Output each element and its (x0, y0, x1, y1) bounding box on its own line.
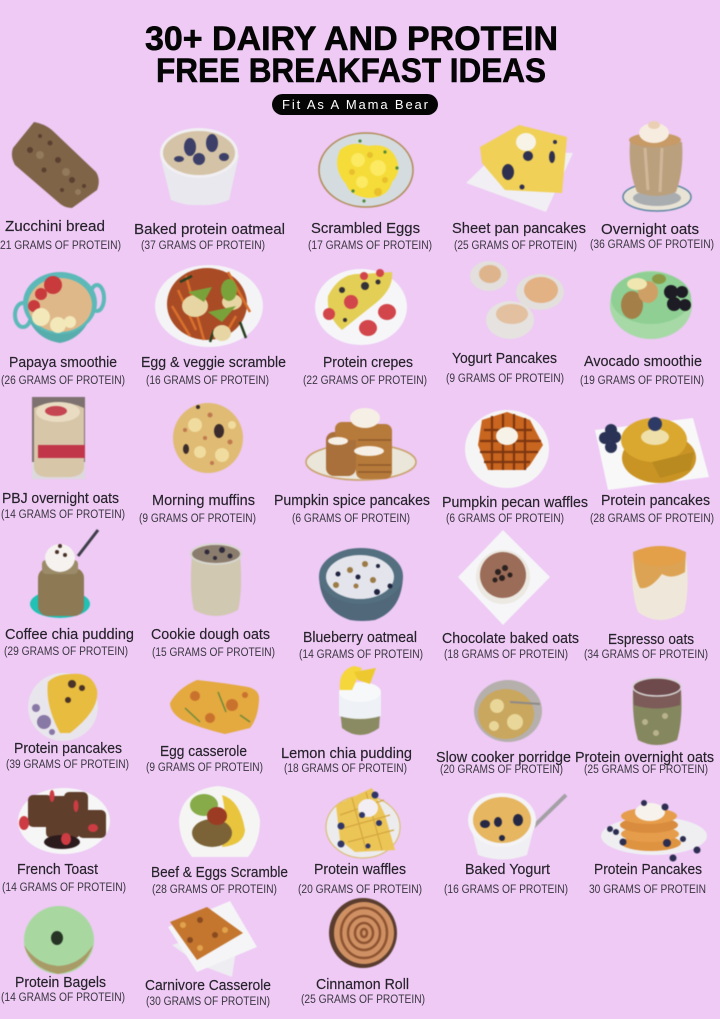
icon: pancake stack with blueberries (601, 800, 707, 862)
protein amount: (20 GRAMS OF PROTEIN) (440, 764, 563, 776)
protein amount: (16 GRAMS OF PROTEIN) (146, 375, 269, 387)
name: Protein pancakes (601, 492, 710, 509)
card: Protein pancakes (590, 417, 714, 525)
name: Cinnamon Roll (316, 976, 409, 993)
protein amount: (14 GRAMS OF PROTEIN) (2, 882, 126, 894)
card: Beef & Eggs Scramble (151, 786, 288, 896)
protein amount: (20 GRAMS OF PROTEIN) (298, 884, 422, 896)
protein amount: (37 GRAMS OF PROTEIN) (141, 240, 265, 252)
name: Overnight oats (601, 221, 699, 238)
icon: espresso oats jar (632, 546, 688, 620)
card: Lemon chia pudding (281, 666, 412, 775)
icon: baked yogurt ramekin with spoon (468, 793, 566, 860)
protein amount: (14 GRAMS OF PROTEIN) (1, 992, 125, 1004)
card: French Toast (2, 788, 126, 894)
card: Carnivore Casserole (145, 901, 271, 1008)
name: Protein Pancakes (594, 861, 702, 878)
name: Egg & veggie scramble (141, 354, 286, 371)
brand pill (272, 94, 438, 115)
protein amount: (29 GRAMS OF PROTEIN) (4, 646, 128, 658)
name: Chocolate baked oats (442, 630, 579, 647)
card: Espresso oats (584, 546, 708, 661)
icon: pumpkin spice pancake stack (306, 408, 416, 480)
name: Espresso oats (608, 631, 694, 648)
name: Pumpkin spice pancakes (274, 492, 430, 509)
protein amount: (18 GRAMS OF PROTEIN) (444, 649, 568, 661)
card: Zucchini bread (0, 122, 121, 252)
protein amount: (34 GRAMS OF PROTEIN) (584, 649, 708, 661)
card: Cookie dough oats (151, 544, 275, 659)
card: Morning muffins (139, 403, 256, 525)
icon: chocolate chip pancake on floral plate (28, 673, 98, 741)
name: Beef & Eggs Scramble (151, 864, 288, 881)
protein amount: (9 GRAMS OF PROTEIN) (446, 373, 564, 385)
protein amount: (14 GRAMS OF PROTEIN) (1, 509, 125, 521)
card: Sheet pan pancakes (452, 125, 586, 252)
protein amount: (28 GRAMS OF PROTEIN) (152, 884, 277, 896)
icon: egg and veggie scramble plate (155, 265, 263, 347)
icon: protein waffle with blueberries (326, 788, 400, 858)
icon: French toast plate (18, 788, 110, 854)
protein amount: (14 GRAMS OF PROTEIN) (299, 649, 423, 661)
icon: coffee chia pudding jar (30, 530, 98, 618)
icon: scrambled eggs plate (319, 133, 413, 207)
protein amount: (25 GRAMS OF PROTEIN) (301, 994, 425, 1006)
card: Overnight oats (590, 121, 714, 251)
name: Blueberry oatmeal (303, 629, 417, 646)
name: Scrambled Eggs (311, 220, 420, 237)
icon: cookie dough oats jar (191, 544, 241, 616)
card: Blueberry oatmeal (299, 548, 423, 661)
protein amount: (19 GRAMS OF PROTEIN) (580, 375, 704, 387)
name: Pumpkin pecan waffles (442, 494, 588, 511)
icon: three yogurt pancakes (470, 261, 564, 339)
card: Yogurt Pancakes (446, 261, 564, 385)
card: Protein pancakes 2 (6, 673, 129, 771)
name: Protein pancakes (14, 740, 122, 757)
card: Protein Pancakes 3 (589, 800, 707, 896)
icon: morning muffin (173, 403, 243, 473)
name: Protein crepes (323, 354, 413, 371)
name: Zucchini bread (5, 218, 105, 235)
name: Carnivore Casserole (145, 977, 271, 994)
name: Protein waffles (314, 861, 406, 878)
card: Cinnamon Roll (301, 898, 425, 1006)
icon: avocado topped bagel (24, 906, 94, 974)
icon: egg casserole slice (170, 680, 259, 734)
icon: oatmeal ramekin (160, 128, 239, 205)
icon: cinnamon roll (329, 898, 397, 968)
icon: pumpkin pecan waffle (465, 410, 549, 488)
card: Egg & veggie scramble (141, 265, 286, 387)
title: FREE BREAKFAST IDEAS (156, 52, 546, 90)
name: PBJ overnight oats (2, 490, 119, 507)
card: Baked protein oatmeal (134, 128, 285, 252)
protein amount: (18 GRAMS OF PROTEIN) (284, 763, 407, 775)
card: Egg casserole (146, 680, 263, 774)
name: Yogurt Pancakes (452, 350, 557, 367)
protein amount: (6 GRAMS OF PROTEIN) (446, 513, 564, 525)
card: Scrambled Eggs (308, 133, 432, 252)
name: Baked protein oatmeal (134, 221, 285, 238)
name: Morning muffins (152, 492, 255, 509)
name: Sheet pan pancakes (452, 220, 586, 237)
name: Egg casserole (160, 743, 247, 760)
protein amount: (9 GRAMS OF PROTEIN) (146, 762, 263, 774)
card: Protein waffles (298, 788, 422, 896)
card: Pumpkin spice pancakes (274, 408, 430, 525)
icon: avocado smoothie bowl (610, 271, 692, 339)
icon: crepes with strawberries (315, 269, 407, 345)
card: Protein Bagels (1, 906, 125, 1004)
protein amount: (9 GRAMS OF PROTEIN) (139, 513, 256, 525)
card: Avocado smoothie (580, 271, 704, 387)
icon: lemon chia pudding glass (339, 666, 381, 735)
protein amount: (39 GRAMS OF PROTEIN) (6, 759, 129, 771)
name: Coffee chia pudding (5, 626, 134, 643)
protein amount: (26 GRAMS OF PROTEIN) (1, 375, 125, 387)
protein amount: (25 GRAMS OF PROTEIN) (454, 240, 577, 252)
icon: papaya smoothie bowl (15, 272, 104, 343)
card: Papaya smoothie (1, 272, 125, 387)
card: Protein overnight oats (575, 678, 714, 776)
card: Slow cooker porridge (436, 680, 571, 776)
icon: carnivore casserole on plates (168, 901, 257, 977)
icon: sheet pan pancakes on plate (466, 125, 573, 212)
card: Pumpkin pecan waffles (442, 410, 588, 525)
icon: PBJ overnight oats jar (32, 397, 85, 479)
card: Coffee chia pudding (4, 530, 134, 658)
name: Slow cooker porridge (436, 749, 571, 766)
protein amount: (22 GRAMS OF PROTEIN) (303, 375, 427, 387)
icon: zucchini bread loaf (12, 122, 99, 208)
protein amount: (16 GRAMS OF PROTEIN) (444, 884, 568, 896)
name: Papaya smoothie (9, 354, 117, 371)
title: 30+ DAIRY AND PROTEIN (145, 20, 558, 58)
card: PBJ overnight oats (1, 397, 125, 521)
protein amount: (30 GRAMS OF PROTEIN) (146, 996, 270, 1008)
brand pill: Fit As A Mama Bear (282, 97, 429, 112)
title (145, 20, 558, 90)
icon: protein overnight oats jar (633, 678, 682, 745)
name: Protein Bagels (15, 974, 106, 991)
icon: protein pancakes on square plate (595, 417, 709, 490)
protein amount: (6 GRAMS OF PROTEIN) (292, 513, 410, 525)
card: Protein crepes (303, 269, 427, 387)
card: Baked Yogurt (444, 793, 568, 896)
protein amount: 30 GRAMS OF PROTEIN (589, 884, 706, 896)
name: Baked Yogurt (465, 861, 551, 878)
icon: overnight oats glass (623, 121, 691, 211)
name: Avocado smoothie (584, 353, 702, 370)
protein amount: (17 GRAMS OF PROTEIN) (308, 240, 432, 252)
icon: blueberry oatmeal bowl (319, 548, 403, 621)
name: Protein overnight oats (575, 749, 714, 766)
name: Cookie dough oats (151, 626, 270, 643)
icon: beef and eggs scramble plate (179, 786, 260, 857)
name: Lemon chia pudding (281, 745, 412, 762)
protein amount: 21 GRAMS OF PROTEIN) (0, 240, 121, 252)
name: French Toast (17, 861, 99, 878)
protein amount: (15 GRAMS OF PROTEIN) (152, 647, 275, 659)
card: Chocolate baked oats (442, 530, 579, 661)
icon: chocolate baked oats on diamond plate (458, 530, 550, 625)
icon: slow cooker porridge bowl (474, 680, 542, 742)
protein amount: (25 GRAMS OF PROTEIN) (584, 764, 708, 776)
